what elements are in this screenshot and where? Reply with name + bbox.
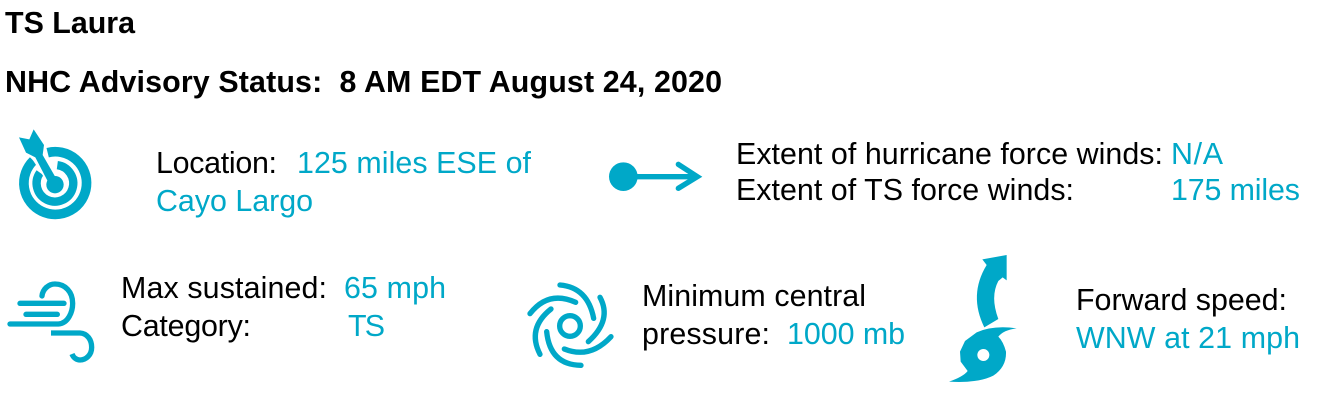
wind extent text: Extent of TS force winds: <box>736 173 1074 207</box>
location text: 125 miles ESE of <box>297 146 532 180</box>
wind extent text: 175 miles <box>1171 173 1300 207</box>
max sustained wind text: Max sustained: <box>121 271 327 305</box>
icon: cyclone spiral <box>530 285 611 365</box>
hurricane symbol <box>949 327 1017 382</box>
icon: wind <box>10 284 92 360</box>
max sustained wind text <box>121 271 446 343</box>
icon: forward motion arrow and hurricane <box>949 255 1017 382</box>
central pressure text: Minimum central <box>642 279 866 313</box>
location text <box>156 146 532 218</box>
wind extent text: Extent of hurricane force winds: <box>736 137 1163 171</box>
central pressure text: 1000 mb <box>787 317 905 351</box>
forward speed text: WNW at 21 mph <box>1076 321 1300 355</box>
wind extent text: N/A <box>1171 137 1224 171</box>
forward speed text <box>1076 283 1300 355</box>
max sustained wind text: 65 mph <box>344 271 446 305</box>
max sustained wind text: Category: <box>121 309 251 343</box>
location text: Location: <box>156 146 277 180</box>
location text: Cayo Largo <box>156 184 313 218</box>
advisory status heading: NHC Advisory Status: 8 AM EDT August 24, 2020 <box>5 65 722 99</box>
title: TS Laura <box>5 6 136 40</box>
forward speed text: Forward speed: <box>1076 283 1287 317</box>
arrow <box>977 255 1007 327</box>
icon: wind radius arrow <box>609 162 697 191</box>
central pressure text: pressure: <box>642 317 770 351</box>
central pressure text <box>642 279 905 351</box>
max sustained wind text: TS <box>348 309 385 343</box>
icon: target with arrow <box>19 129 87 214</box>
wind extent text <box>736 137 1300 207</box>
